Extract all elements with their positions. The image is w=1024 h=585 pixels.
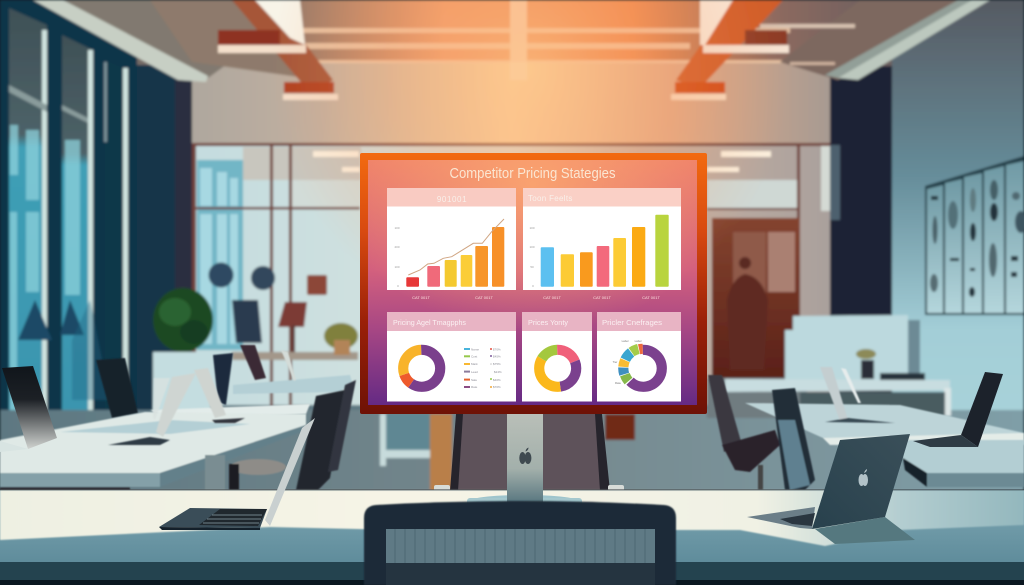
warm glow overlay xyxy=(230,0,830,340)
far laptop left xyxy=(281,350,296,381)
category labels xyxy=(412,295,660,300)
upper wall xyxy=(192,62,832,145)
legend: $40% xyxy=(493,378,501,382)
ceiling lights in glass room xyxy=(313,151,771,172)
laptop: middle left xyxy=(108,373,196,445)
legend: Mark xyxy=(471,362,478,366)
floor xyxy=(0,410,1024,500)
chair behind monitor xyxy=(434,414,624,491)
legend: Rate xyxy=(471,385,478,389)
donut callouts xyxy=(613,339,642,385)
laptop: middle right xyxy=(820,367,895,423)
trend line xyxy=(408,219,504,275)
axis labels: 100 xyxy=(394,226,400,230)
legend: Sale xyxy=(471,378,477,382)
donut callouts: Tier xyxy=(613,360,617,364)
laptop: middle second xyxy=(194,368,245,423)
axis labels: 100 xyxy=(394,265,400,269)
right desk near xyxy=(903,440,1024,487)
right ceiling beam and light xyxy=(671,0,789,100)
right wall xyxy=(892,0,1024,440)
axis labels: 50 xyxy=(530,265,534,269)
legend: Name xyxy=(471,347,479,351)
left window panes xyxy=(9,8,47,430)
small potted plant xyxy=(856,349,876,379)
icon: apple logo on stand xyxy=(519,448,531,464)
donut chart xyxy=(539,350,576,387)
back right desk xyxy=(725,373,951,416)
donut callouts: Label xyxy=(622,339,629,343)
panel heading: 901001 xyxy=(437,195,467,204)
panel heading: Toon Feelts xyxy=(528,194,573,203)
ceiling xyxy=(100,0,920,70)
axis labels xyxy=(394,226,400,288)
donut callouts: Label xyxy=(635,339,642,343)
legend xyxy=(464,347,502,389)
left window wall xyxy=(0,0,137,440)
category labels: CAT 001T xyxy=(543,295,561,300)
left dark column xyxy=(137,65,192,415)
icon: apple logo on laptop xyxy=(858,469,868,486)
laptop: far right xyxy=(913,372,1003,447)
monitor screen xyxy=(368,160,697,405)
back left desk xyxy=(150,350,352,420)
back office door with silhouette xyxy=(707,180,800,378)
left ceiling beam and light xyxy=(218,0,338,100)
monitor stand xyxy=(467,414,582,509)
wall lamps and round signs xyxy=(208,262,327,355)
laptop: far left xyxy=(0,366,57,452)
bars xyxy=(541,215,669,287)
monitor xyxy=(360,153,707,414)
legend: Lead xyxy=(471,370,478,374)
glass room xyxy=(192,145,832,405)
office chairs right xyxy=(708,375,815,490)
panel: bar chart xyxy=(523,188,681,290)
back white shelf xyxy=(380,414,430,466)
legend: $70% xyxy=(493,385,501,389)
ceiling ducts left xyxy=(33,0,320,82)
back shelf and far plant xyxy=(232,323,358,360)
category labels: CAT 001T xyxy=(593,295,611,300)
dashboard title: Competitor Pricing Stategies xyxy=(450,165,616,182)
category labels: CAT 001T xyxy=(642,295,660,300)
right column xyxy=(830,66,892,426)
right desk far xyxy=(745,403,1024,445)
right partition xyxy=(785,315,920,385)
panel: line and bar chart xyxy=(387,188,516,290)
laptop: front right xyxy=(747,434,915,544)
posters on right wall xyxy=(925,156,1024,315)
wood column behind monitor xyxy=(430,414,452,494)
back chairs left xyxy=(96,345,266,418)
desk: middle left xyxy=(0,412,306,493)
panel: donut xyxy=(522,312,592,402)
legend: $24% xyxy=(494,370,502,374)
donut callouts: Rate xyxy=(615,381,621,385)
legend: $70% xyxy=(493,347,501,351)
legend: Cost xyxy=(471,354,477,358)
front desk xyxy=(0,489,1024,585)
axis labels: 0 xyxy=(532,284,534,288)
plant and pot xyxy=(153,288,213,412)
donut chart xyxy=(623,348,663,388)
donut chart xyxy=(403,350,440,387)
axis labels xyxy=(529,226,535,288)
panel heading: Pricler Cnefrages xyxy=(602,318,662,327)
panel: segmented donut xyxy=(597,312,681,402)
panel: donut with legend xyxy=(387,312,516,402)
glass room window xyxy=(197,147,361,350)
panel heading: Pricing Agel Tmagpphs xyxy=(393,318,466,327)
panel heading: Prices Yonty xyxy=(528,318,568,327)
ceiling pipes xyxy=(150,0,830,80)
axis labels: 200 xyxy=(394,245,400,249)
chair mesh xyxy=(386,529,655,563)
front chair xyxy=(364,501,676,585)
category labels: CAT 001T xyxy=(412,295,430,300)
legend: $45% xyxy=(493,354,501,358)
legend: $75% xyxy=(493,362,501,366)
office chair left xyxy=(229,380,356,490)
bars xyxy=(406,227,504,287)
axis labels: 100 xyxy=(529,245,535,249)
monitor frame xyxy=(360,153,707,414)
axis labels: 100 xyxy=(529,226,535,230)
category labels: CAT 001T xyxy=(475,295,493,300)
axis labels: 0 xyxy=(397,284,399,288)
glass room frames xyxy=(192,143,832,406)
ceiling ducts right xyxy=(760,0,990,80)
laptop: front left xyxy=(159,418,315,530)
